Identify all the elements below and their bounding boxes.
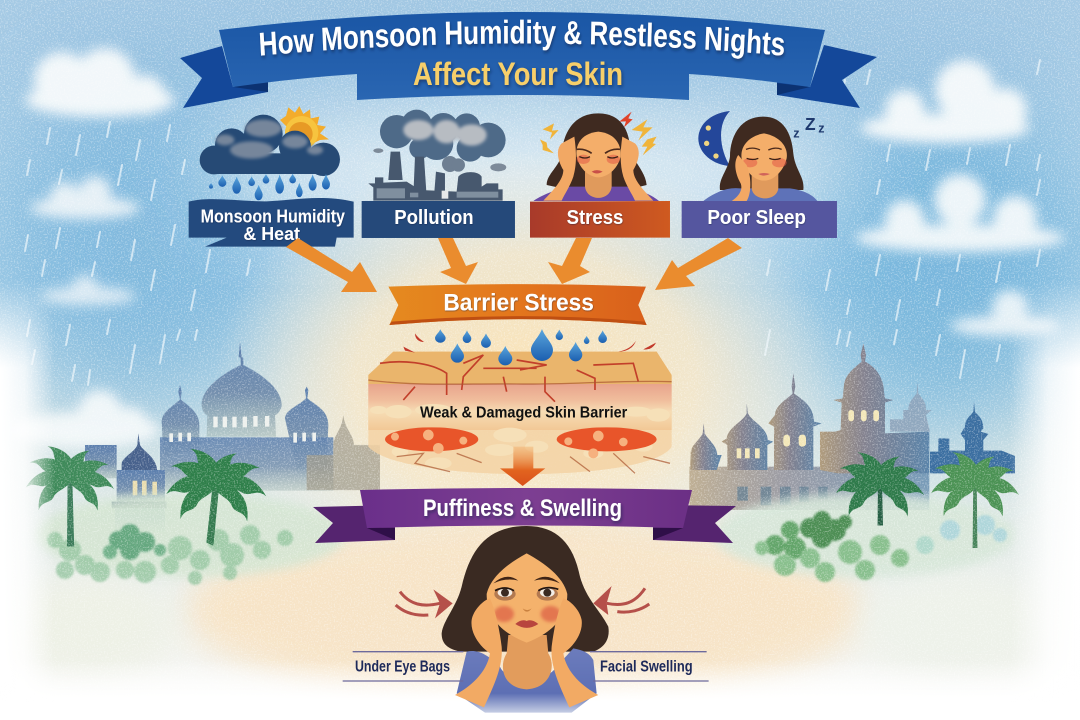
icon: rain drops: [209, 174, 330, 200]
white edge vignette: [0, 287, 1080, 676]
label: under eye bags: Under Eye Bags: [355, 659, 450, 676]
right hand and arm: [551, 598, 598, 707]
icon: sleep zzz: z: [793, 126, 800, 140]
swelling arrow right: [593, 586, 649, 615]
arrow: down to puffiness: [500, 447, 545, 486]
palm tree 1: [25, 439, 115, 546]
factor: poor sleep: [682, 111, 837, 238]
foliage: right greenery: [715, 493, 1015, 582]
clouds: [10, 48, 1065, 448]
foliage: left greenery: [35, 493, 345, 585]
label lines: [343, 652, 709, 681]
swelling arrow left: [396, 589, 453, 618]
label text: Stress: [567, 207, 623, 229]
ribbon right tail: [653, 505, 736, 543]
arrow from monsoon: [286, 238, 377, 292]
arrow from stress: [548, 238, 592, 284]
palm tree 2: [165, 441, 268, 546]
palm tree 4: [930, 445, 1020, 548]
woman hair: [720, 117, 803, 190]
factor: stress: [530, 112, 670, 238]
barrier stress heading: Barrier Stress: [443, 290, 594, 317]
woman hand: [732, 155, 750, 201]
face: [487, 553, 567, 643]
left city skyline: [85, 342, 380, 532]
skin barrier diagram: [368, 284, 672, 486]
skin cross-section: [368, 333, 672, 474]
icon: factory: [368, 152, 503, 201]
icon: lightning bolts: [540, 112, 657, 155]
hair: [442, 526, 609, 652]
label text: & Heat: [243, 223, 300, 244]
banner main ribbon: [219, 12, 825, 100]
woman shirt: [703, 188, 817, 201]
label text: [201, 205, 346, 244]
banner right tail: [777, 45, 877, 108]
bottom white fade: [0, 660, 1080, 720]
arrow from pollution: [438, 238, 478, 284]
label text: Monsoon Humidity: [201, 205, 346, 226]
label text: Pollution: [394, 207, 474, 229]
icon: smoke cloud: [373, 110, 506, 172]
shirt: [457, 648, 597, 713]
palm tree 3: [835, 445, 925, 526]
woman left hand: [543, 137, 576, 201]
icon: sleep zzz: Z: [805, 114, 816, 134]
label box: [189, 198, 354, 247]
title line 2: Affect Your Skin: [413, 56, 623, 92]
ribbon left tail: [313, 505, 395, 543]
woman neck: [752, 173, 778, 198]
woman face: [741, 133, 787, 181]
label box: [362, 201, 515, 238]
icon: sun: [280, 106, 329, 149]
rain streaks: [25, 60, 1040, 385]
ribbon folds: [367, 528, 683, 540]
orange arrows into barrier stress: [286, 238, 742, 292]
ribbon front: [360, 488, 692, 528]
arrow from poor sleep: [655, 238, 742, 290]
ribbon text: Puffiness & Swelling: [423, 495, 622, 522]
woman neck: [585, 172, 612, 198]
woman right hand: [621, 137, 653, 201]
right city skyline: [689, 343, 1015, 510]
barrier stress ribbon: [388, 284, 647, 325]
icon: crescent moon: [698, 111, 730, 166]
label: facial swelling: Facial Swelling: [600, 659, 693, 676]
woman face: [576, 132, 621, 177]
neck and chest: [503, 635, 552, 689]
label box: [682, 201, 837, 238]
water droplets: [435, 329, 607, 365]
label box: [530, 201, 670, 238]
label text: Poor Sleep: [707, 207, 806, 229]
skin barrier label: Weak & Damaged Skin Barrier: [420, 405, 627, 422]
swollen face illustration: [343, 526, 709, 713]
factor: monsoon humidity and heat: [189, 106, 354, 247]
icon: sleep zzz: z: [818, 122, 825, 136]
left hand and arm: [455, 598, 502, 707]
woman hair: [547, 113, 647, 190]
woman shirt: [533, 187, 659, 201]
banner folds: [233, 80, 810, 95]
banner left tail: [180, 46, 268, 108]
title line 1: How Monsoon Humidity & Restless Nights: [260, 20, 786, 62]
puffiness and swelling ribbon: [313, 488, 736, 543]
factor: pollution: [362, 110, 515, 238]
icon: storm cloud: [200, 115, 340, 176]
title banner: [180, 12, 877, 108]
icon: sleep zzz: [793, 114, 825, 140]
